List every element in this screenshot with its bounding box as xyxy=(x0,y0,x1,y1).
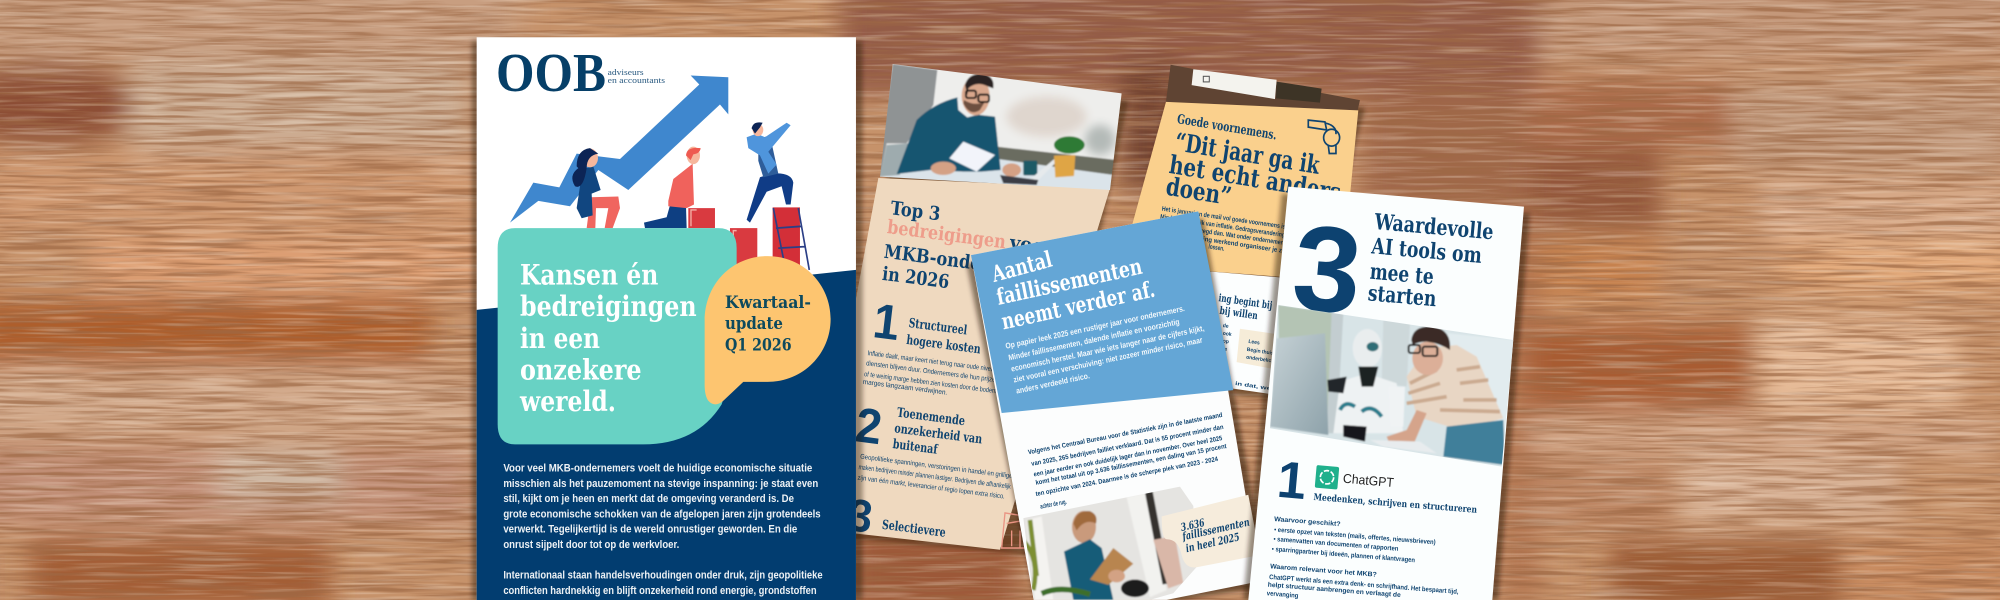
brochure: Goede voornemens xyxy=(1100,65,1365,401)
threat 2: buitenaf xyxy=(892,436,940,457)
tool description xyxy=(1267,516,1459,600)
threat 3: Selectievere xyxy=(881,516,947,540)
intro text: economisch herstel. Maar wie iets langer naar de cijfers kijkt, xyxy=(1010,324,1205,374)
heading xyxy=(1367,209,1495,312)
subheading and note: bij willen xyxy=(1219,305,1259,322)
photo: woman with robot xyxy=(1263,300,1517,470)
heading: Dit jaar: doen” xyxy=(1164,171,1234,211)
title xyxy=(519,259,697,418)
logo: OOB adviseurs en accountants: adviseurs xyxy=(608,68,644,77)
figure: man pointing up xyxy=(747,122,793,223)
intro text: anders verdeeld risico. xyxy=(1015,371,1091,396)
heading: faillissementen xyxy=(994,253,1144,311)
subheading and note xyxy=(1218,292,1286,393)
tool description: • samenvatten van documenten of rapporten xyxy=(1273,536,1399,553)
threat 3 xyxy=(845,490,947,543)
heading: Top 3: voor xyxy=(1008,232,1055,259)
page: wooden photo strip xyxy=(1166,65,1360,110)
threat 1: Inflatie daalt, maar keert niet terug naar oude niveaus xyxy=(867,350,1001,374)
intro text: aan de verandering werkend organiseer je zo xyxy=(1156,229,1286,255)
intro text: is makkelijker gezegd dan. Wat onder ondernemers xyxy=(1158,221,1286,247)
heading: Dit jaar: “Dit jaar ga ik xyxy=(1173,127,1322,180)
body text: conflicten hardnekkig en blijft onzekerheid rond energie, grondstoffen xyxy=(503,585,817,597)
brochure: 3 Waardevolle AI tools xyxy=(1243,187,1530,600)
title: bedreigingen xyxy=(520,291,697,323)
boxes and ladder xyxy=(688,207,809,270)
icon: bank outline xyxy=(1002,513,1027,548)
threat 1: hogere kosten xyxy=(906,332,982,357)
threat 1: of te weinig marge hebben zien kosten door de bodem xyxy=(864,371,997,395)
threat 3: 3 xyxy=(845,490,875,543)
title: Kansen én xyxy=(520,259,658,292)
heading: Dit jaar xyxy=(1164,111,1343,211)
threat 2: Toenemende xyxy=(896,404,966,428)
page: yellow top section xyxy=(1123,102,1358,281)
callout: 3.636 faillissementen: faillissementen xyxy=(1181,516,1251,543)
threat 1: diensten blijven duur. Ondernemers die hun prijzen xyxy=(866,360,999,384)
subheading and note: ing begint bij xyxy=(1218,292,1273,312)
icon: ChatGPT logo xyxy=(1315,465,1339,490)
threat 1 xyxy=(862,294,1001,397)
intro text: ziet vooral een verschuiving: niet zozeer minder risico, maar xyxy=(1013,335,1203,384)
heading: neemt verder af. xyxy=(999,276,1157,336)
intro text: Het is januari en de mail vol goede voornemens is xyxy=(1161,206,1286,231)
intro text: Minder faillissementen, dalende inflatie en voorzichtig xyxy=(1008,317,1180,362)
body text: onrust sijpelt door tot op de werkvloer. xyxy=(503,540,679,551)
heading: starten xyxy=(1367,280,1437,312)
body text: stil, kijkt om je heen en merkt dat de omgeving veranderd is. De xyxy=(503,494,794,505)
subheading and note: op xyxy=(1222,338,1229,345)
subheading and note: in dat, wel xyxy=(1235,381,1274,393)
heading: Dit jaar: Goede voornemens. xyxy=(1176,111,1278,143)
page xyxy=(477,37,856,600)
speech bubble: Kwartaalupdate: Kwartaal- xyxy=(725,292,811,312)
tool description: Waarvoor geschikt? xyxy=(1274,516,1341,528)
tool 1: ChatGPT: 1 xyxy=(1275,450,1309,510)
page: white lower section xyxy=(1100,264,1287,395)
body text: Voor veel MKB-ondernemers voelt de huidige economische situatie xyxy=(503,463,812,475)
title: in een xyxy=(520,323,600,355)
intro text xyxy=(1156,206,1286,255)
threat 2: zijn van één markt, leverancier of regio lopen extra risico. xyxy=(857,475,1005,501)
subheading and note: Lees xyxy=(1248,339,1260,347)
callout: 3.636 faillissementen: 3.636 xyxy=(1180,517,1206,534)
teal title block xyxy=(498,228,737,444)
body text: ten opzichte van 2024. Daarmee is de scherpe piek van 2023 - 2024 xyxy=(1035,456,1219,498)
tool description: ChatGPT werkt als een extra denk- en schrijfhand. Het bespaart tijd, xyxy=(1269,574,1459,596)
illustration: growth arrow and climbing figures xyxy=(510,75,809,270)
subheading and note: ook xyxy=(1222,331,1232,338)
heading: Top 3: Top 3 xyxy=(889,198,942,226)
logo: OOB adviseurs en accountants: OOB xyxy=(496,43,606,104)
threat 2 xyxy=(853,398,1013,501)
logo: OOB adviseurs en accountants xyxy=(496,43,665,104)
heading: Aantal xyxy=(988,246,1055,288)
subheading and note: de xyxy=(1222,323,1229,330)
page background xyxy=(813,178,1110,550)
threat 1: Structureel xyxy=(908,315,968,338)
navy lower section xyxy=(477,270,856,600)
heading: Dit jaar: het echt anders xyxy=(1167,149,1343,207)
brochure: Aantal faillissementen xyxy=(967,211,1268,600)
main brochure: Kansen en bedreigingen xyxy=(472,37,863,600)
threat 1: marges langzaam verdwijnen. xyxy=(862,379,948,397)
heading: Top 3 xyxy=(881,198,1057,293)
body text: Volgens het Centraal Bureau voor de Statistiek zijn in de laatste maand xyxy=(1027,412,1223,456)
body text: Internationaal staan handelsverhoudingen onder druk, zijn geopolitieke xyxy=(503,570,823,582)
arrow xyxy=(510,75,728,223)
subheading and note: te xyxy=(1222,346,1228,353)
body text: misschien als het pauzemoment na stevige inspanning: je staat even xyxy=(503,479,818,490)
heading: AI tools om xyxy=(1370,233,1483,269)
body text xyxy=(1027,412,1228,511)
tool description: • sparringpartner bij ideeën, plannen of klantvragen xyxy=(1272,546,1415,564)
callout: 3.636 faillissementen xyxy=(1162,495,1260,567)
heading: Top 3: in 2026 xyxy=(881,263,950,293)
threat 2: maken bedrijven minder plannen lastiger. Bedrijven die afhankelijk xyxy=(858,464,1012,491)
heading: mee te xyxy=(1369,259,1435,290)
title: onzekere xyxy=(520,355,642,387)
page xyxy=(1248,187,1524,600)
tool description: • eerste opzet van teksten (mails, offertes, nieuwsbrieven) xyxy=(1274,527,1436,546)
threat 2: onzekerheid van xyxy=(894,420,983,447)
threat 2: Geopolitieke spanningen, verstoringen in handel en grillige xyxy=(860,453,1013,480)
icon: hand with light bulb xyxy=(1308,120,1340,153)
blue header xyxy=(971,211,1233,413)
heading: Top 3: bedreigingen xyxy=(886,217,1007,253)
tool description: helpt structuur aanbrengen en verlaagt de xyxy=(1268,582,1401,599)
tool description: vervanging xyxy=(1267,590,1299,600)
body text: komt het totaal uit op 3.636 faillissementen, een daling van 15 procent xyxy=(1035,443,1228,487)
figure: woman xyxy=(572,148,620,228)
heading: Top 3: MKB-ondernemers xyxy=(883,241,1057,285)
page xyxy=(971,211,1260,600)
threat 2: 2 xyxy=(853,398,885,456)
subheading and note: Begin thuis, met xyxy=(1246,347,1286,359)
title: wereld. xyxy=(519,386,616,418)
threat 1: 1 xyxy=(870,294,902,351)
body text xyxy=(503,463,823,597)
intro text xyxy=(1005,304,1205,396)
intro text: Minder afhankelijk van inflatie. Gedragsverandering xyxy=(1160,214,1285,239)
figure: kneeling man xyxy=(644,147,701,228)
body text: een jaar eerder en ook duidelijk lager dan in november. Over heel 2025 xyxy=(1033,435,1223,478)
photo: man reading at desk xyxy=(877,60,1127,193)
brochure: Top 3 bedreigingen xyxy=(813,71,1128,555)
intro text: lossen. xyxy=(1208,243,1225,253)
heading: Waardevolle xyxy=(1373,209,1495,245)
callout: 3.636 faillissementen: in heel 2025 xyxy=(1185,531,1241,555)
speech bubble: Kwartaalupdate: Q1 2026 xyxy=(725,335,792,355)
speech bubble: Kwartaalupdate: update xyxy=(725,313,783,333)
logo: OOB adviseurs en accountants: en accountants xyxy=(608,76,665,85)
intro text: Op papier leek 2025 een rustiger jaar voor ondernemers. xyxy=(1005,304,1185,351)
subheading and note: onderbelicht xyxy=(1246,355,1276,365)
tool 1: ChatGPT: Meedenken, schrijven en structureren xyxy=(1313,492,1478,516)
speech bubble: Kwartaalupdate xyxy=(705,256,831,404)
tool 1: ChatGPT: ChatGPT xyxy=(1342,471,1395,490)
big number 3: 3 xyxy=(1288,199,1367,340)
photo: man reading a book xyxy=(1020,485,1207,600)
body text: achter de rug. xyxy=(1040,499,1067,511)
body text: van 2025, 265 bedrijven failliet verklaard. Dat is 55 procent minder dan xyxy=(1031,424,1224,468)
body text: verwerkt. Tegelijkertijd is de wereld onrustiger geworden. En die xyxy=(503,524,797,536)
icon: binder clip xyxy=(1192,69,1322,103)
heading xyxy=(988,246,1157,336)
tool 1: ChatGPT xyxy=(1275,450,1478,516)
tool description: Waarom relevant voor het MKB? xyxy=(1270,563,1377,579)
body text: grote economische schokken van de afgelopen jaren zijn grotendeels xyxy=(503,509,821,521)
